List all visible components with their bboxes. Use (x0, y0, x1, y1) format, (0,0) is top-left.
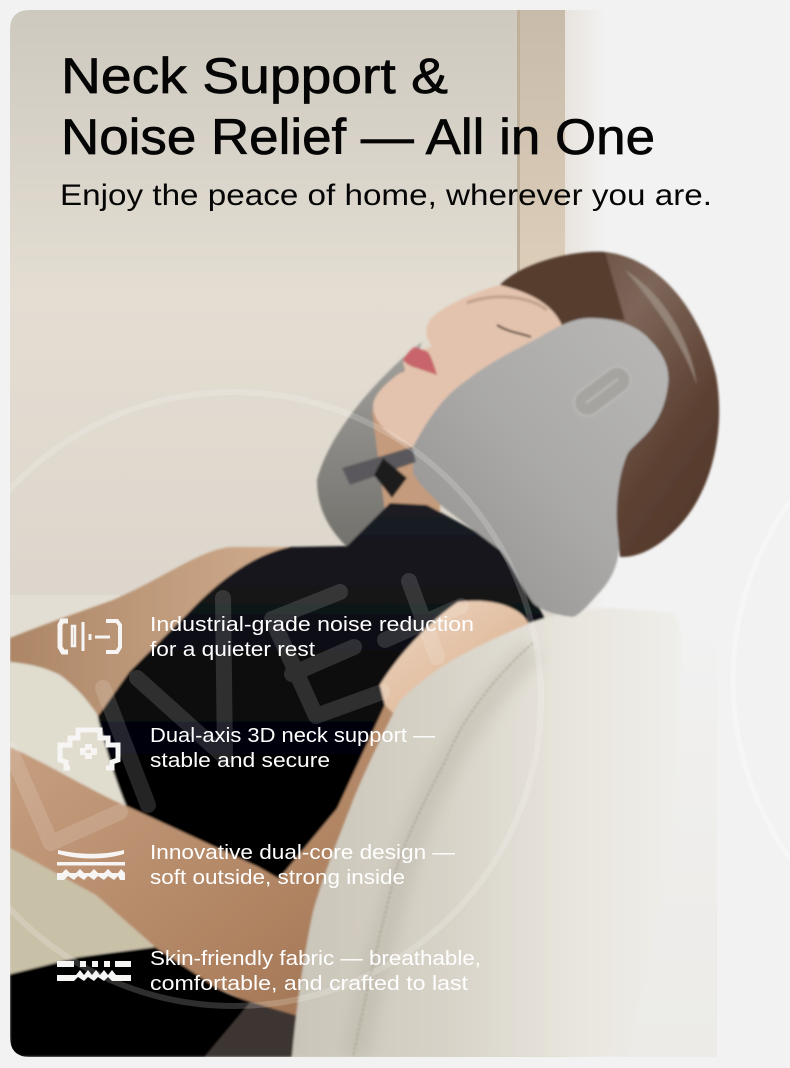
window light (565, 10, 590, 608)
text: Industrial-grade noise reduction (150, 613, 474, 636)
hair (572, 250, 721, 559)
icon: layers (57, 850, 125, 880)
chair (292, 608, 681, 1057)
tag (374, 458, 407, 498)
icon: fabric layers (57, 961, 131, 981)
chair stitching (353, 643, 533, 1057)
strap (342, 447, 416, 485)
shoulder (380, 601, 530, 715)
title (61, 48, 655, 165)
fringe (500, 252, 625, 328)
lower-right pale area (629, 917, 717, 1057)
text: for a quieter rest (150, 638, 315, 661)
icon: sound wave in brackets (60, 621, 120, 652)
text (150, 947, 481, 995)
feature: noise reduction (60, 613, 474, 661)
upper cushion (10, 662, 127, 808)
black bottom (10, 947, 251, 1057)
eye (497, 325, 531, 337)
subtitle: Enjoy the peace of home, wherever you are. (60, 179, 712, 212)
button (576, 368, 629, 414)
text: comfortable, and crafted to last (150, 972, 468, 995)
text (150, 613, 474, 661)
neck (372, 410, 440, 525)
curtain (517, 10, 565, 274)
text: soft outside, strong inside (150, 866, 405, 889)
dark gap (205, 1002, 305, 1057)
text: Skin-friendly fabric — breathable, (150, 947, 481, 970)
watermark letters (10, 581, 461, 843)
text: stable and secure (150, 749, 330, 772)
faint right watermark ring (733, 373, 790, 987)
text: Innovative dual-core design — (150, 841, 456, 864)
wall (10, 10, 570, 1057)
brow (467, 297, 547, 310)
text (150, 724, 436, 772)
chair shadow seam (355, 650, 533, 1057)
lips (403, 347, 437, 375)
watermark ring (0, 392, 541, 1006)
text: Dual-axis 3D neck support — (150, 724, 436, 747)
feature: dual-core design (57, 841, 456, 889)
icon: neck cross-section (60, 730, 118, 768)
feature: skin-friendly fabric (57, 947, 481, 995)
lower cushion (10, 848, 155, 974)
back pillow (317, 342, 422, 547)
wainscot panel (10, 595, 120, 645)
watermark (0, 392, 541, 1006)
person and chair (10, 252, 719, 1057)
text (150, 841, 456, 889)
front pillow (413, 318, 668, 617)
feature: neck support (60, 724, 436, 772)
title: Neck Support & (61, 48, 448, 104)
face (373, 285, 580, 447)
forearm (10, 700, 400, 1018)
upper arm (10, 547, 290, 716)
title: Noise Relief — All in One (61, 109, 655, 165)
black top (98, 503, 548, 879)
hair highlight (625, 270, 697, 385)
